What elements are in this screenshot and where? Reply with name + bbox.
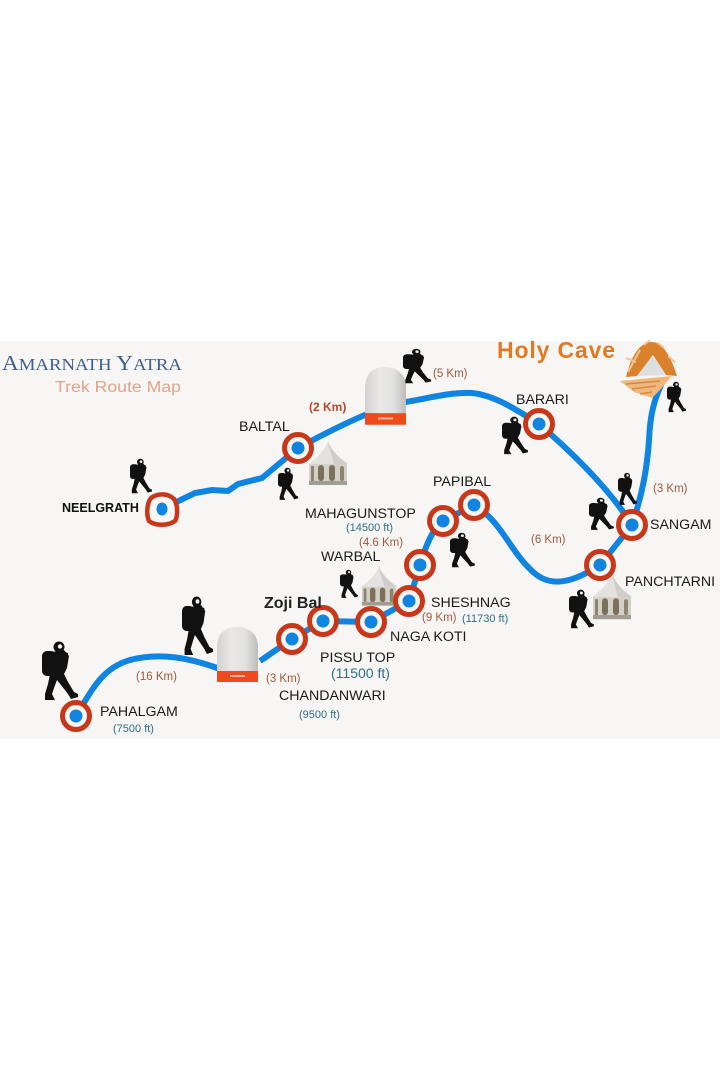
labels: place names: NEELGRATH (62, 501, 139, 515)
labels: altitudes: (7500 ft) (113, 723, 154, 735)
labels: distances: (2 Km) (309, 400, 346, 414)
icon: hiker on 16 km stretch (182, 596, 213, 655)
labels: altitudes: (14500 ft) (346, 522, 393, 534)
icon: holy cave (620, 340, 677, 398)
labels: distances: (3 Km) (266, 673, 301, 685)
labels: altitudes (113, 522, 508, 735)
icon: tent at Baltal (308, 441, 348, 485)
labels: place names: PAPIBAL (433, 474, 491, 490)
icon: tent at Warbal (361, 566, 397, 606)
labels: place names: PAHALGAM (100, 704, 178, 720)
icon: hiker Pahalgam (42, 642, 78, 700)
icon: hiker Mahagunstop (450, 533, 475, 567)
labels: place names: WARBAL (321, 549, 380, 565)
stop: Barari (526, 410, 552, 438)
icon: hiker Panchtarni (569, 590, 594, 628)
labels: distances: (6 Km) (531, 534, 566, 546)
icon: hiker Barari (502, 417, 528, 454)
map background panel (0, 341, 720, 739)
title: AMARNATH YATRA (2, 351, 183, 375)
labels: distances: (3 Km) (653, 483, 688, 495)
route: Chandanwari to Sangam via Papibal (260, 505, 632, 661)
labels: distances: (16 Km) (136, 671, 177, 683)
labels: place names (62, 392, 715, 720)
title: Trek Route Map (55, 379, 181, 396)
route: Pahalgam to Chandanwari dome (76, 656, 220, 716)
labels: place names: PISSU TOP (320, 650, 395, 666)
icon: hiker Neelgrath (130, 459, 152, 493)
labels: place names: NAGA KOTI (390, 629, 466, 645)
labels: place names: MAHAGUNSTOP (305, 506, 416, 522)
icon: hiker Warbal (340, 570, 358, 598)
labels: place names: BALTAL (239, 419, 290, 435)
labels: altitudes: (9500 ft) (299, 709, 340, 721)
labels: distances: (4.6 Km) (359, 537, 403, 549)
labels: place names: CHANDANWARI (279, 688, 386, 704)
labels: distances: (9 Km) (422, 612, 457, 624)
icon: hiker Holy Cave (667, 382, 686, 412)
stop: Neelgrath (147, 494, 177, 525)
labels: distances (136, 368, 688, 685)
stop: Chandanwari (278, 626, 306, 652)
labels: altitudes: (11730 ft) (462, 613, 508, 625)
icon: hiker top 5 km (403, 349, 431, 383)
route: Neelgrath to Barari and Sangam (162, 393, 632, 525)
labels: distances: (5 Km) (433, 368, 468, 380)
title (2, 351, 183, 396)
icon: dome shelter near Baltal (365, 367, 406, 425)
stop: Panchtarni (586, 552, 614, 578)
stop: Zoji Bal (310, 608, 336, 634)
labels: altitudes: (11500 ft) (331, 665, 390, 681)
stop: Warbal (406, 552, 434, 578)
labels: place names: BARARI (516, 392, 569, 408)
icon: dome shelter near Chandanwari (217, 627, 258, 682)
icon: hiker Baltal (278, 468, 298, 500)
stop: Mahagunstop (430, 508, 456, 534)
icon: hiker Sangam left (589, 498, 614, 530)
labels: place names: Zoji Bal (264, 595, 322, 612)
labels: place names: SANGAM (650, 517, 712, 533)
stop: Sangam (618, 512, 646, 538)
stop: Pahalgam (62, 702, 90, 730)
labels: place names: SHESHNAG (431, 595, 511, 611)
stop: Pissu Top (358, 608, 384, 636)
heading: Holy Cave: Holy Cave (497, 337, 615, 363)
stop: Baltal (284, 434, 312, 462)
route: Sangam to Holy Cave (632, 385, 661, 525)
stop: Sheshnag (396, 588, 422, 614)
stop: Papibal (460, 492, 488, 518)
icon: hiker Sangam right (618, 473, 637, 505)
icon: tent at Panchtarni (592, 573, 632, 619)
labels: place names: PANCHTARNI (625, 574, 715, 590)
